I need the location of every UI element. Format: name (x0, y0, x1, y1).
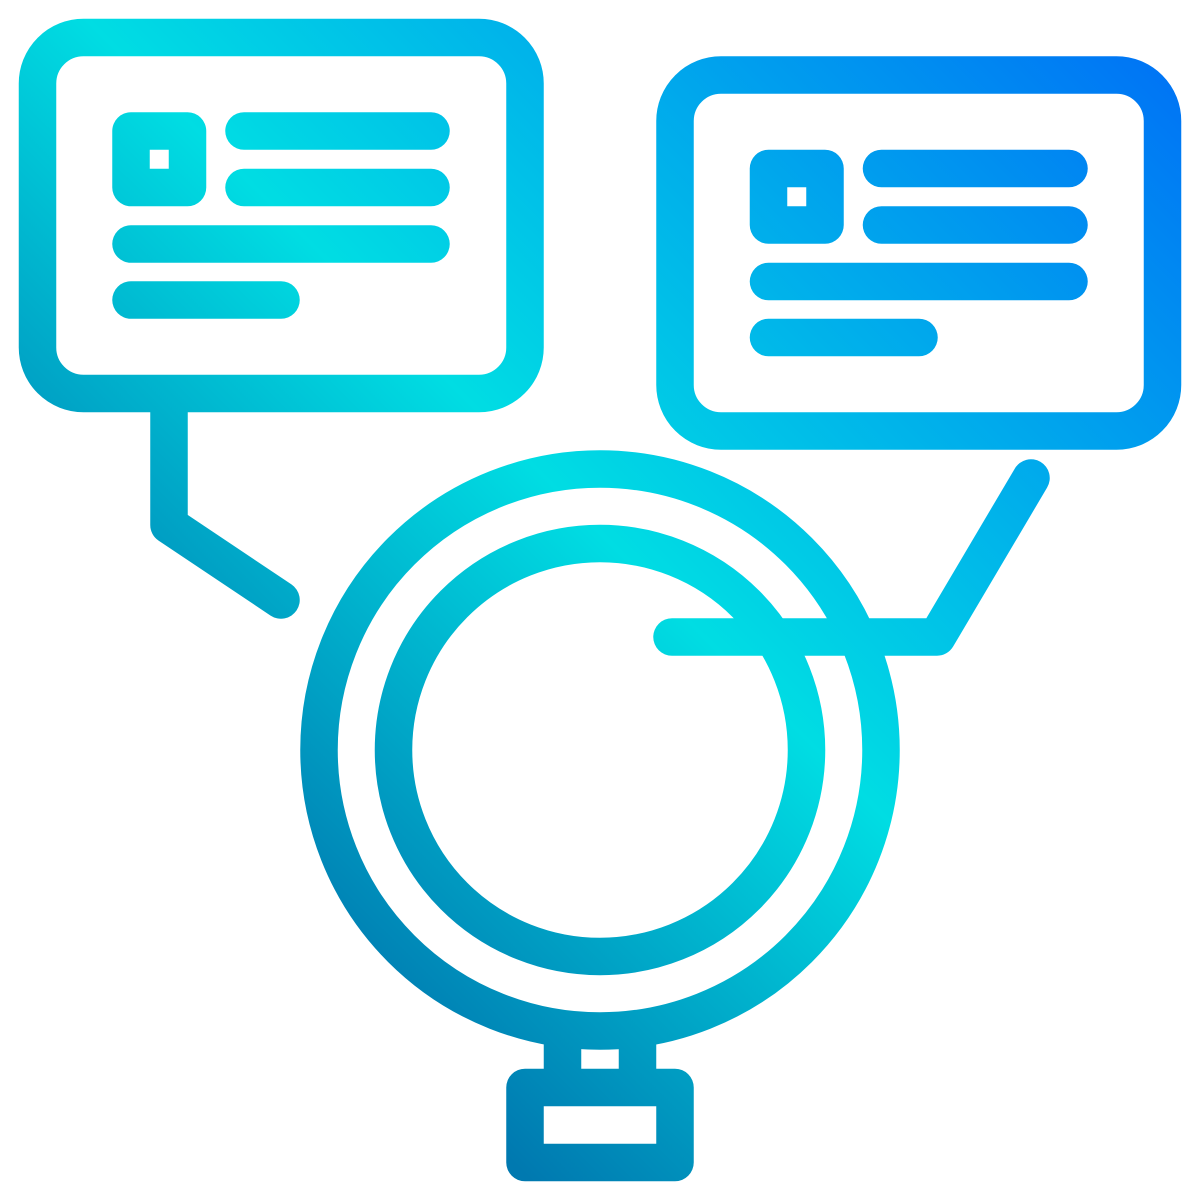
right callout pointer (672, 478, 1031, 637)
handle grip (525, 1088, 675, 1162)
panel: right callout (672, 75, 1162, 637)
left callout square icon (131, 131, 188, 188)
right callout frame (675, 75, 1162, 431)
outer lens ring (319, 469, 881, 1031)
icon: magnifying glass (319, 469, 881, 1162)
left callout frame (38, 38, 525, 394)
left callout text lines (131, 131, 431, 300)
right callout text lines (768, 168, 1069, 338)
panel: left callout (38, 38, 525, 600)
left callout pointer (169, 400, 281, 600)
right callout square icon (768, 168, 825, 225)
handle connectors (562, 1035, 638, 1087)
inner lens ring (394, 544, 806, 956)
